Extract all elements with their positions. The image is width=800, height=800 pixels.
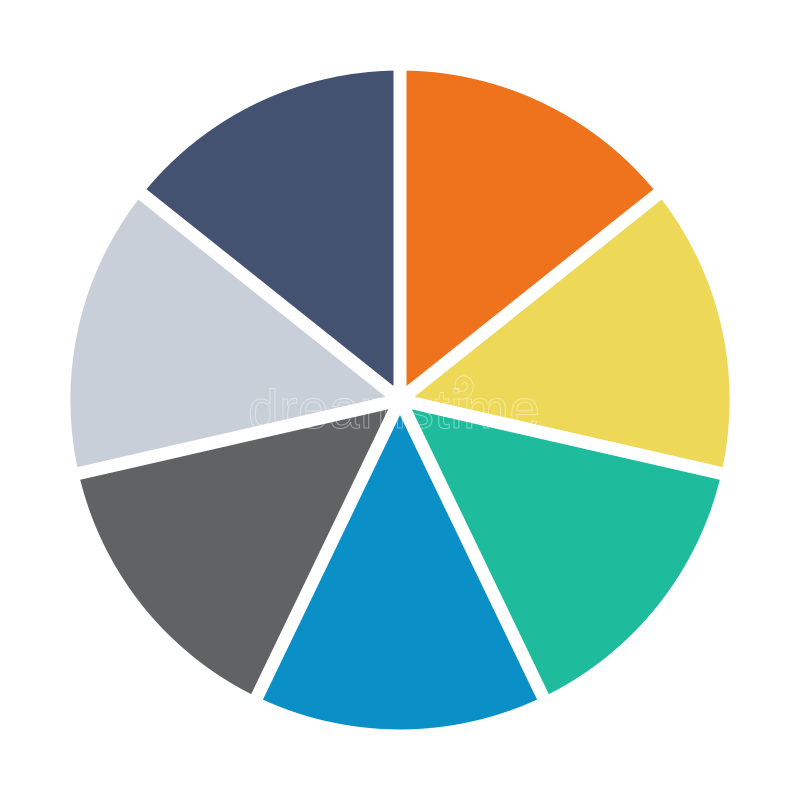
watermark: spiral icon <box>455 376 473 399</box>
segment: dark gray <box>80 409 388 694</box>
segment: light gray <box>70 200 385 467</box>
segment: blue <box>263 415 537 729</box>
segment: yellow <box>415 200 730 467</box>
segment: orange <box>406 71 654 386</box>
watermark <box>248 376 540 440</box>
segment: teal <box>412 409 720 694</box>
watermark: wordmark: dreamstime <box>248 378 540 440</box>
segment: navy <box>146 71 394 386</box>
